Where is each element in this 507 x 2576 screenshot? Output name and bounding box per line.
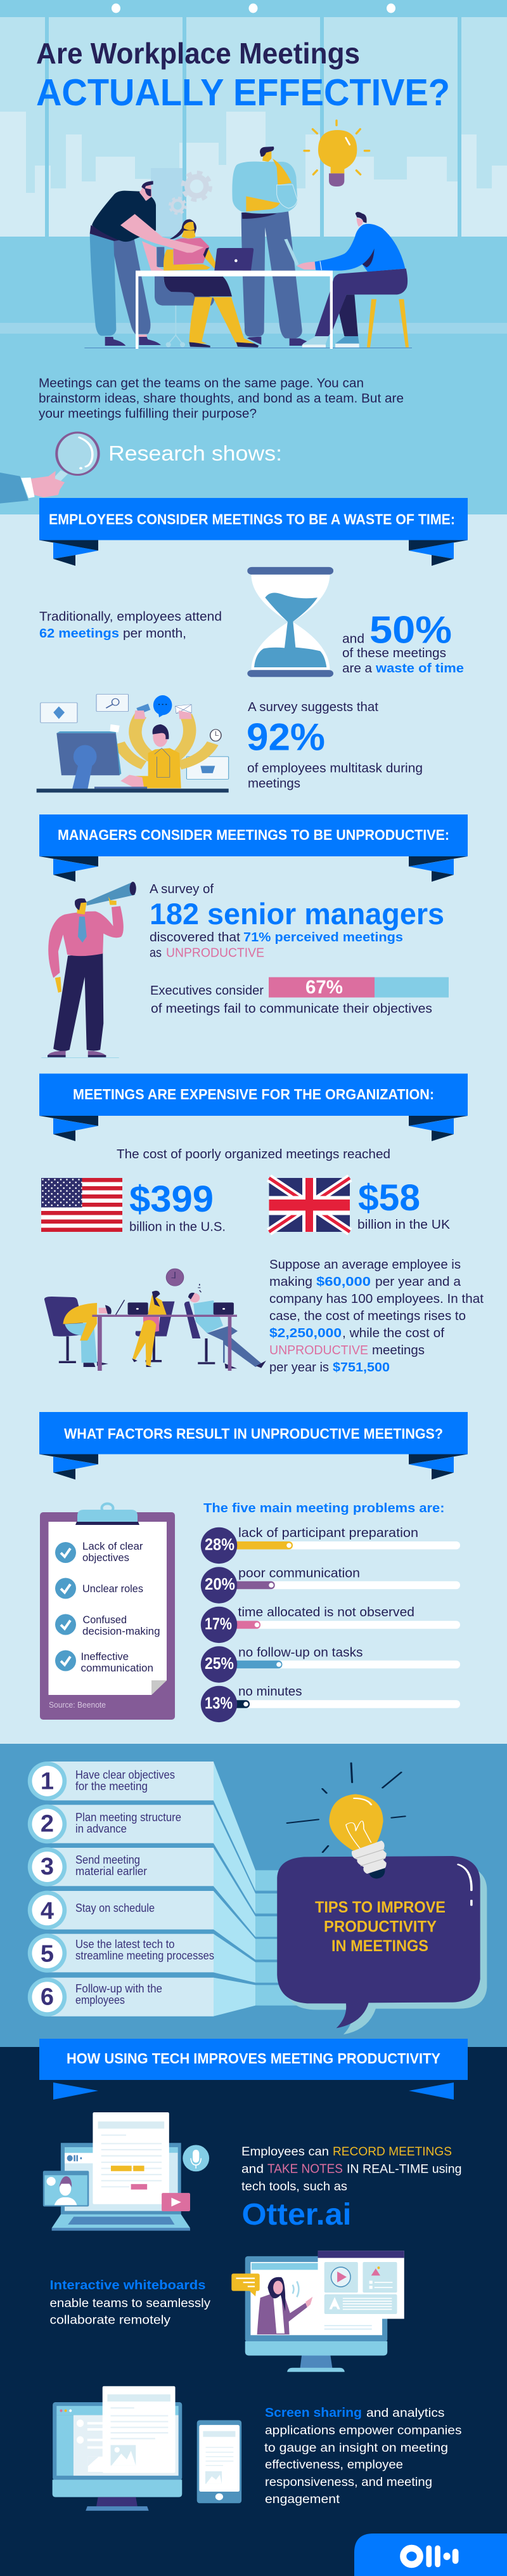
tip 2: 2 [41,1810,54,1837]
man pointing [90,181,165,346]
paragraph: cost calculation: $751,500 [333,1361,390,1375]
text: 182 senior managers: 182 senior managers [150,897,444,931]
bar: 28 percent: 28% [205,1535,234,1554]
person on phone [132,1291,175,1367]
stat bar: 67 percent [150,977,449,1016]
icon: shield box [41,703,77,722]
banner: managers: MANAGERS CONSIDER MEETINGS TO BE UNPRODUCTIVE: [58,827,449,843]
tip 6: employees [75,1994,125,2006]
icon: tips light bulb [287,1763,405,1879]
presenter [257,2277,312,2334]
stat: US cost: billion in the U.S. [129,1220,226,1234]
tip 3: Send meeting [75,1854,140,1866]
callout: tips speech bubble: TIPS TO IMPROVE [315,1899,446,1916]
panel: clipboard [40,1503,175,1720]
banner: employees: EMPLOYEES CONSIDER MEETINGS TO BE A WASTE OF TIME: [49,511,455,528]
background: hero sky [0,0,507,514]
bar: 20 percent: poor communication [238,1567,360,1581]
intro text: brainstorm ideas, share thoughts, and bond as a team. But are [39,392,404,406]
stat: 92 percent: of employees multitask during [247,761,423,775]
tip 3 [28,1847,214,1886]
text: record meetings: TAKE NOTES [267,2162,343,2176]
tip 6: Follow-up with the [75,1982,162,1995]
banner: factors [39,1412,468,1479]
paragraph: cost calculation: case, the cost of meetings rises to [269,1309,466,1323]
illustration: manager with telescope [41,882,136,1058]
purple table [92,1315,237,1371]
paragraph: cost calculation: company has 100 employees. In that [269,1292,484,1306]
bar: 25 percent [201,1645,460,1683]
stat bar: 67 percent: 67% [305,977,343,998]
icon: clock [210,729,221,741]
stat: 92 percent: A survey suggests that [248,700,378,714]
illustration: laptop with notes [43,2112,209,2231]
office window and skyline [0,4,507,334]
paragraph: cost calculation: Suppose an average employee is [269,1258,461,1272]
heading: research shows: Research shows: [108,441,282,465]
text: interactive whiteboards: collaborate remotely [49,2314,171,2327]
banner: expensive: MEETINGS ARE EXPENSIVE FOR THE ORGANIZATION: [73,1086,434,1102]
stat: US cost: $399 [129,1179,214,1220]
checklist: objectives [82,1552,129,1564]
paper [48,1522,167,1695]
text: record meetings: Otter.ai [242,2198,351,2232]
panel: tips list [28,1762,300,2017]
sleeping zzz [198,1284,201,1292]
stat: UK cost: $58 [358,1177,420,1219]
icon: wall clock [166,1269,184,1286]
intro text: Meetings can get the teams on the same page. You can [39,377,364,391]
paragraph: cost calculation: $2,250,000 [269,1326,342,1340]
text: 182 senior managers: UNPRODUCTIVE [166,946,264,960]
tip 1 [28,1762,214,1800]
funnel connectors [214,1762,300,2017]
white table [136,271,333,349]
title: ACTUALLY EFFECTIVE? [36,72,450,114]
text: 182 senior managers: discovered that [150,931,240,945]
icon: hand holding magnifying glass [0,433,99,504]
intro text: your meetings fulfilling their purpose? [39,407,257,421]
stat: 50 percent: 50% [369,609,452,651]
bar: 25 percent: 25% [205,1654,234,1673]
banner: managers [39,814,468,882]
bar: 28 percent [201,1526,460,1564]
document [103,2386,176,2473]
background: tips section [0,1744,507,2047]
checklist: communication [81,1662,153,1674]
text: screen sharing: and analytics [366,2407,445,2420]
icon: envelope [176,705,191,714]
text: screen sharing: Screen sharing [265,2406,362,2420]
bar: 25 percent: no follow-up on tasks [238,1645,363,1659]
paragraph: cost calculation: per year is [269,1361,329,1375]
title [36,37,450,114]
checklist: decision-making [82,1625,160,1637]
text: interactive whiteboards [49,2279,211,2327]
text: record meetings: tech tools, such as [241,2180,347,2194]
document with highlights [93,2112,169,2204]
icon: light bulb [304,121,369,186]
text: cost intro: The cost of poorly organized meetings reached [117,1147,390,1161]
bar: 13 percent: 13% [205,1694,233,1713]
stat: 50 percent: waste of time [375,662,464,676]
intro text [39,377,404,421]
tip 3: 3 [41,1854,54,1880]
paragraph: cost calculation: meetings [372,1344,425,1357]
bar: 28 percent: lack of participant preparation [238,1526,418,1540]
person sleeping on desk [44,1297,124,1367]
background: light content area [0,514,507,1744]
tip 1: 1 [41,1769,54,1795]
text: 182 senior managers: 71% perceived meetings [243,931,403,945]
title: Are Workplace Meetings [36,37,360,70]
text: interactive whiteboards: enable teams to seamlessly [49,2297,211,2310]
text: 182 senior managers: as [150,946,162,960]
text: 62 meetings [39,610,222,641]
checklist: Confused [82,1614,127,1626]
illustration: bored employees at table [44,1269,266,1371]
desktop [53,2402,182,2511]
person leaning back [184,1293,266,1368]
man standing [232,147,307,346]
tip 4: Stay on schedule [75,1902,155,1914]
laptop [214,239,299,271]
tip 5 [28,1933,214,1973]
banner: how tech improves: HOW USING TECH IMPROVES MEETING PRODUCTIVITY [67,2050,440,2067]
icon: US flag [41,1178,122,1232]
checklist [55,1540,160,1674]
text: 182 senior managers: A survey of [150,882,214,896]
icon: chat bubble [231,2273,260,2296]
text: 62 meetings: 62 meetings [39,627,119,641]
text: screen sharing: applications empower companies [265,2424,461,2437]
text: record meetings: Employees can [241,2145,329,2159]
illustration: virtual whiteboard monitor [231,2251,404,2372]
tip 5: Use the latest tech to [75,1938,175,1951]
text: record meetings: and [241,2163,264,2176]
icon: UK flag [269,1178,350,1232]
bar: 17 percent: 17% [205,1614,232,1633]
office chair [155,247,214,347]
paragraph: cost calculation: UNPRODUCTIVE [269,1344,368,1357]
bar: 17 percent [201,1605,460,1643]
stat: 50 percent: and [342,632,364,646]
icon: play button [162,2193,190,2211]
stat: 50 percent: are a [342,662,373,676]
tip 2 [28,1805,214,1843]
icon: hourglass [247,567,333,677]
logo: footer badge [354,2534,507,2576]
source: Source: Beenote [49,1700,106,1710]
tip 4: 4 [41,1898,54,1925]
tip 6: 6 [41,1984,54,2011]
tip 1: for the meeting [75,1780,148,1793]
stat: 92 percent: meetings [248,776,300,790]
person [120,724,181,788]
icon: search box [96,694,129,712]
icon: microphone [183,2145,209,2171]
text: screen sharing: responsiveness, and meeting [265,2476,432,2489]
banner: employees [39,498,468,566]
stat bar: 67 percent: Executives consider [150,984,264,998]
callout: tips speech bubble: IN MEETINGS [331,1937,428,1955]
text: 182 senior managers [150,882,444,960]
tip 1: Have clear objectives [75,1769,175,1781]
icon: folder box [186,757,229,779]
tip 2: in advance [75,1822,127,1835]
checklist: Unclear roles [82,1583,143,1595]
text: 62 meetings: per month, [123,627,186,641]
man seated at stool [297,212,409,348]
paragraph: cost calculation: making [269,1275,312,1289]
illustration: multitasking employee [37,694,229,792]
banner: how tech improves [39,2039,468,2100]
stat: US cost [129,1179,226,1234]
stat: 50 percent: of these meetings [342,646,446,660]
stat: UK cost: billion in the UK [357,1218,451,1232]
video call window [43,2171,89,2207]
banner: expensive [39,1073,468,1141]
content window [318,2251,404,2319]
pointing arm [120,214,204,252]
text: screen sharing: engagement [265,2493,340,2506]
callout: tips speech bubble: PRODUCTIVITY [324,1918,437,1936]
clip [75,1503,139,1525]
icon: speech bubble [153,695,172,717]
icon: gears [170,173,210,214]
checklist: Ineffective [81,1651,129,1663]
text: screen sharing: effectiveness, employee [265,2459,403,2471]
text: 62 meetings: Traditionally, employees attend [39,610,222,624]
stat: 92 percent: 92% [247,716,325,759]
bar: 13 percent: no minutes [238,1685,302,1699]
paragraph: cost calculation [269,1258,484,1375]
text: interactive whiteboards: Interactive whiteboards [49,2279,205,2292]
checklist: Lack of clear [82,1540,143,1552]
woman seated [164,219,259,348]
text: record meetings: RECORD MEETINGS [333,2145,452,2159]
computer monitor [56,724,147,791]
paragraph: cost calculation: per year and a [375,1275,461,1289]
illustration: screen sharing desktop and phone [53,2386,241,2511]
illustration: team meeting around table [84,121,412,349]
bar: 17 percent: time allocated is not observed [238,1605,414,1619]
text: record meetings [241,2145,461,2232]
phone [197,2420,241,2503]
stat bar: 67 percent: of meetings fail to communicate their objectives [151,1002,432,1016]
bar: 13 percent [201,1685,460,1722]
paragraph: cost calculation: , while the cost of [342,1326,444,1340]
laptop right [214,1302,234,1315]
stat: 92 percent [247,700,423,790]
icon: phone [136,703,150,714]
bar: 20 percent [201,1567,460,1604]
tip 4 [28,1891,214,1930]
banner: factors: WHAT FACTORS RESULT IN UNPRODUCTIVE MEETINGS? [64,1425,443,1442]
tip 2: Plan meeting structure [75,1811,181,1824]
tip 3: material earlier [75,1865,147,1878]
text: record meetings: IN REAL-TIME using [347,2163,461,2176]
stat: UK cost [357,1177,451,1232]
callout: tips speech bubble [277,1856,487,2034]
bar: 20 percent: 20% [205,1574,235,1593]
tip 6 [28,1978,214,2017]
text: screen sharing [264,2406,461,2506]
laptop left [128,1302,148,1315]
paragraph: cost calculation: $60,000 [316,1275,371,1289]
heading: five main problems: The five main meeting problems are: [203,1501,445,1515]
tip 5: 5 [41,1941,54,1968]
chart: five meeting problems [201,1526,460,1722]
logo mark [67,2155,82,2161]
stat: 50 percent [342,609,464,676]
tip 5: streamline meeting processes [75,1949,214,1962]
background: tech section [0,2047,507,2576]
text: screen sharing: to gauge an insight on meeting [264,2442,448,2455]
